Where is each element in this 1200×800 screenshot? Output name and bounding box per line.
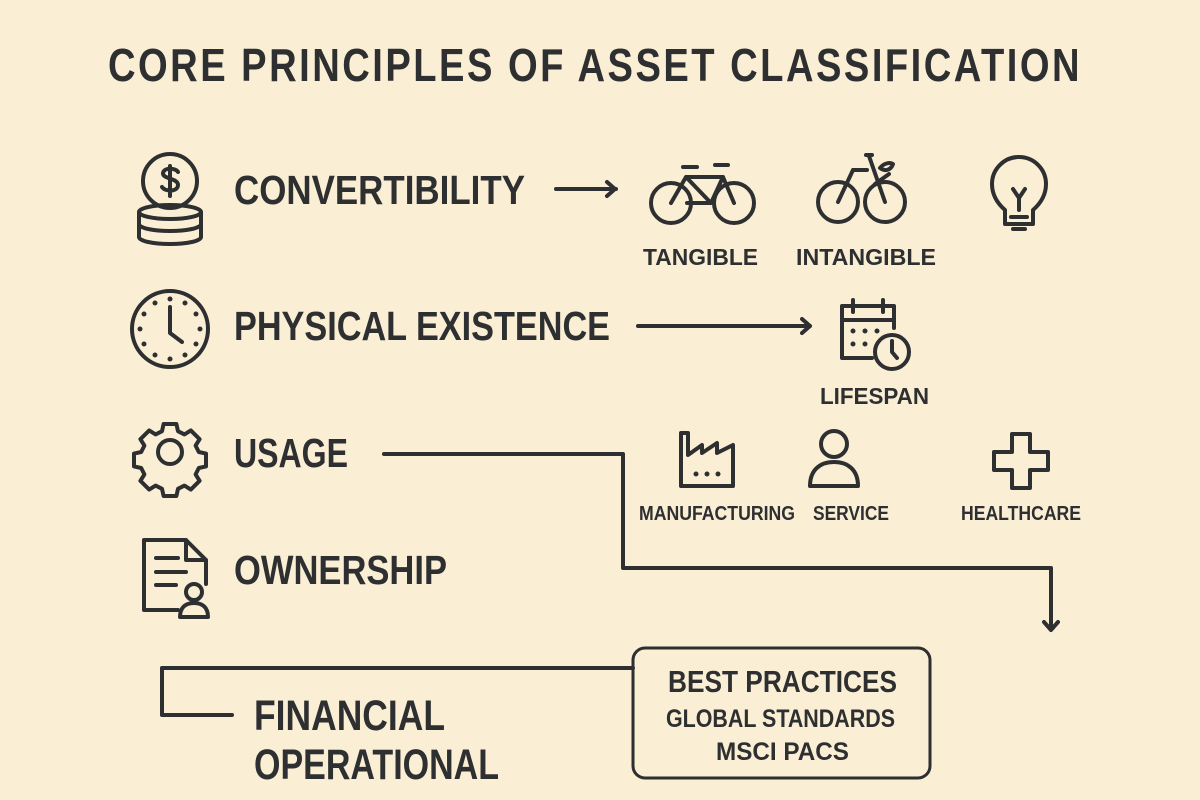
icon: coins: [139, 154, 201, 244]
label: operational: OPERATIONAL: [254, 741, 499, 789]
bracket: financial: [162, 668, 633, 715]
icon: clock: [132, 291, 208, 367]
icon: gear: [134, 424, 206, 496]
label: ownership: OWNERSHIP: [234, 547, 447, 593]
label: physical existence: PHYSICAL EXISTENCE: [234, 303, 610, 349]
icon: bicycle tangible: [651, 165, 754, 223]
icon: factory: [681, 433, 733, 486]
text: msci pacs: MSCI PACS: [716, 738, 849, 766]
arrow: convertibility: [556, 182, 616, 196]
label: convertibility: CONVERTIBILITY: [234, 167, 525, 213]
label: manufacturing: MANUFACTURING: [639, 503, 795, 525]
icon: bicycle intangible: [818, 155, 905, 222]
icon: healthcare cross: [994, 434, 1048, 488]
text: global standards: GLOBAL STANDARDS: [666, 705, 895, 733]
label: lifespan: LIFESPAN: [820, 383, 929, 409]
label: financial: FINANCIAL: [254, 692, 445, 740]
icon: lightbulb: [992, 157, 1046, 229]
icon: calendar: [842, 300, 909, 369]
label: healthcare: HEALTHCARE: [961, 503, 1081, 525]
icon: document: [144, 540, 208, 617]
icon: person: [810, 431, 858, 486]
label: service: SERVICE: [813, 503, 889, 525]
box: best practices: [633, 648, 930, 778]
connector: usage: [384, 454, 1058, 630]
label: usage: USAGE: [234, 430, 348, 476]
text: best practices: BEST PRACTICES: [668, 664, 897, 699]
label: tangible: TANGIBLE: [643, 244, 758, 270]
arrow: physical existence: [638, 319, 810, 333]
label: intangible: INTANGIBLE: [796, 244, 936, 270]
